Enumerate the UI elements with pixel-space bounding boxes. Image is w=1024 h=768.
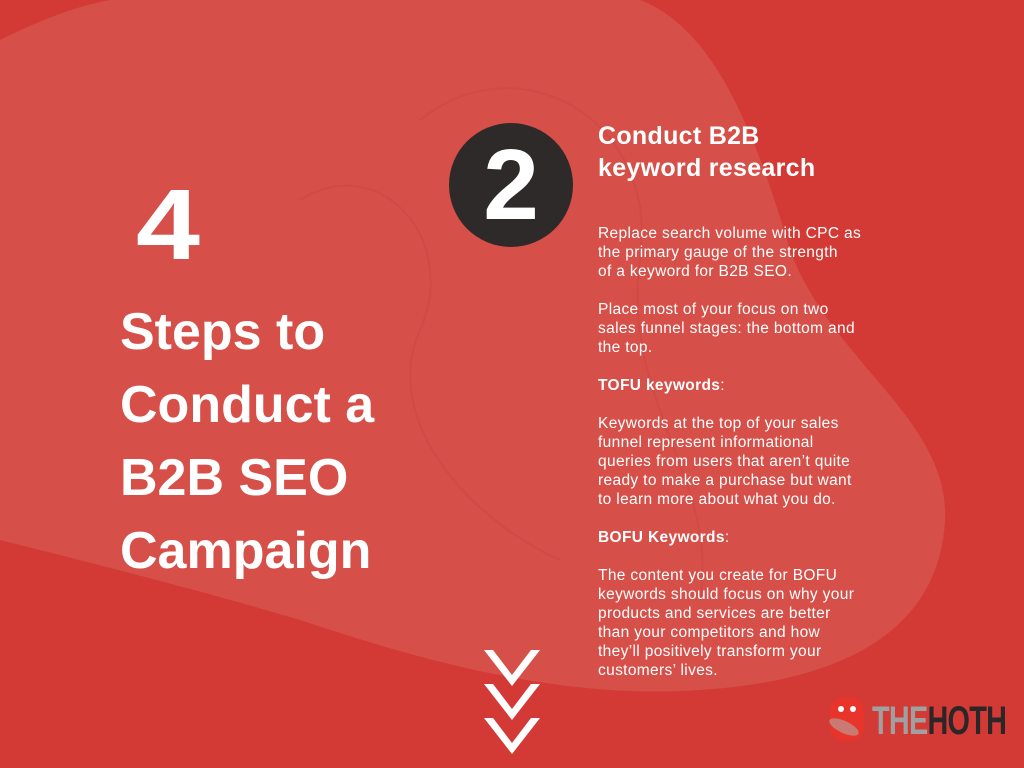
text block: products and services are better	[598, 605, 831, 622]
logo: THEHOTH	[872, 699, 1006, 743]
text block: queries from users that aren’t quite	[598, 453, 850, 470]
icon: step number circle	[449, 123, 573, 247]
text block: TOFU keywords:	[598, 377, 725, 394]
text block: Replace search volume with CPC as	[598, 225, 861, 242]
text block: they’ll positively transform your	[598, 643, 821, 660]
text block: keywords should focus on why your	[598, 586, 854, 603]
number 4: 4	[136, 169, 200, 281]
title	[120, 303, 374, 580]
text block: the primary gauge of the strength	[598, 244, 838, 261]
text block: than your competitors and how	[598, 624, 820, 641]
icon: step number circle: 2	[483, 129, 539, 241]
heading: keyword research	[598, 154, 815, 182]
text block: sales funnel stages: the bottom and	[598, 320, 855, 337]
text block: of a keyword for B2B SEO.	[598, 263, 792, 280]
title: Steps to	[120, 303, 325, 361]
title: B2B SEO	[120, 449, 348, 507]
text block: the top.	[598, 339, 653, 356]
text block: customers’ lives.	[598, 662, 718, 679]
heading: Conduct B2B	[598, 122, 760, 150]
text block: Place most of your focus on two	[598, 301, 829, 318]
text block: to learn more about what you do.	[598, 491, 836, 508]
text block: The content you create for BOFU	[598, 567, 837, 584]
icon: down chevrons	[484, 650, 540, 754]
text block: BOFU Keywords:	[598, 529, 730, 546]
text block: Keywords at the top of your sales	[598, 415, 839, 432]
text block	[598, 225, 861, 679]
title: Conduct a	[120, 376, 374, 434]
text block: funnel represent informational	[598, 434, 814, 451]
title: Campaign	[120, 522, 371, 580]
heading	[598, 122, 815, 182]
text block: ready to make a purchase but want	[598, 472, 852, 489]
